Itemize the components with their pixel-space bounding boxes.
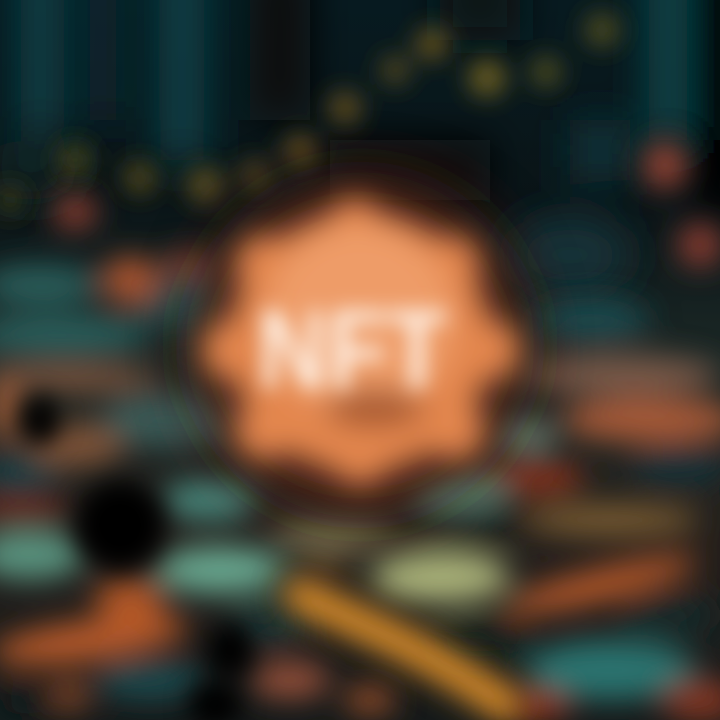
golden dotted trend line	[0, 12, 620, 215]
upper forest of teal stripes	[0, 0, 720, 295]
dark blobs	[21, 396, 252, 720]
orange scalloped badge	[202, 198, 520, 485]
golden stream	[300, 595, 505, 705]
NFT label: NFT	[257, 287, 447, 412]
badge glow	[195, 180, 525, 510]
